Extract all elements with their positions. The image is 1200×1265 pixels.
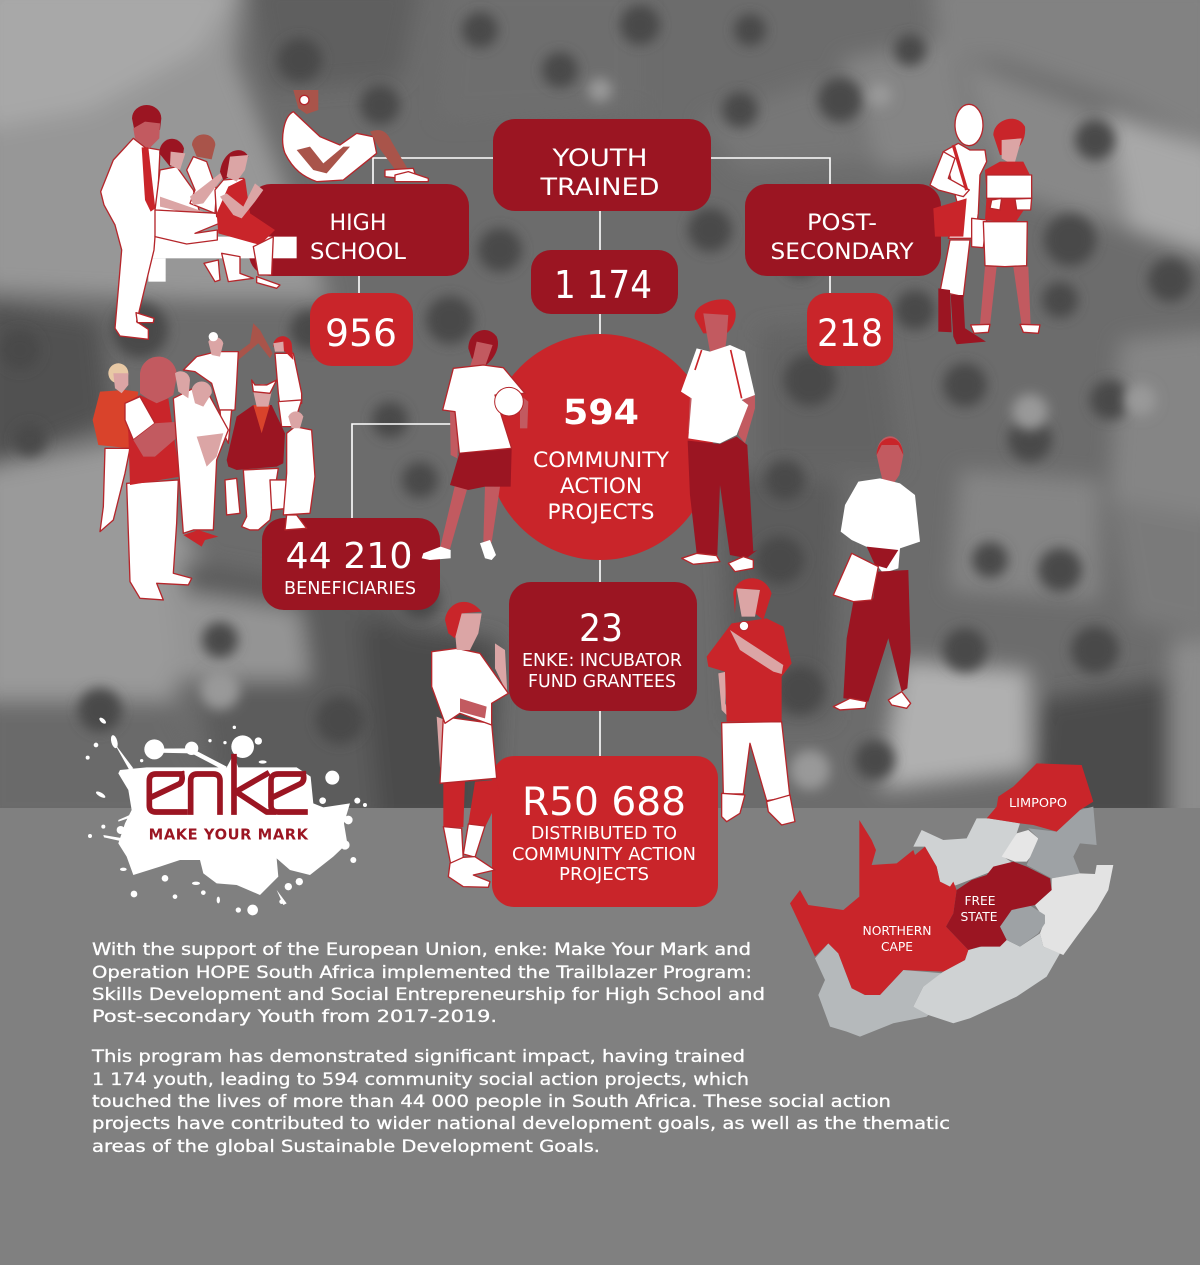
box: 218 [807,293,893,366]
box: rand distributed: COMMUNITY ACTION [512,845,696,865]
box: incubator fund grantees [509,582,697,711]
logo: white paint splat with enke wordmark [86,717,367,915]
box: beneficiaries: BENEFICIARIES [284,579,416,599]
logo: white paint splat with enke wordmark: MAKE YOUR MARK [149,826,309,843]
box: youth trained [493,119,711,211]
figures: community group high five [93,323,315,600]
figures: two young women, post-secondary [930,104,1040,344]
text block: program intro: Operation HOPE South Africa implemented the Trailblazer Program: [92,963,752,982]
background photo: crowd of youth in greyscale [0,0,1200,828]
lesotho [1000,903,1045,947]
box: 1 174 [531,250,678,314]
box: beneficiaries [262,518,440,610]
box: rand distributed [492,756,718,907]
limpopo province [987,763,1093,832]
box: beneficiaries: 44 210 [286,536,412,577]
figures: teacher and pupils on bench [101,105,297,339]
box: incubator fund grantees: ENKE: INCUBATOR [522,651,682,671]
box: rand distributed: DISTRIBUTED TO [531,824,677,844]
gauteng province [1002,830,1038,862]
text block: program intro: With the support of the European Union, enke: Make Your Mark and [92,940,751,959]
circle: community action projects: PROJECTS [548,500,654,524]
eastern cape province [913,933,1060,1023]
circle: community action projects: ACTION [560,474,642,498]
box: 1 174: 1 174 [554,263,652,307]
figure: girl in long jacket [432,602,508,887]
text block: program intro: Post-secondary Youth from 2017-2019. [92,1007,497,1026]
figure: man with shoulder bag [833,436,920,710]
north west province [913,818,1020,887]
box: incubator fund grantees: FUND GRANTEES [528,672,676,692]
map of South Africa: FREE [964,894,996,908]
kwazulu-natal province [1035,865,1113,955]
text block: program impact: areas of the global Sustainable Development Goals. [92,1137,600,1156]
box: post-secondary [745,184,941,276]
text block: program impact [91,1047,950,1156]
box: 956: 956 [325,312,397,355]
figure: tall youth with backpack [681,299,757,572]
northern cape province [790,820,968,995]
box: high school [249,184,469,276]
box: post-secondary: SECONDARY [770,240,914,265]
figure: boy with dreadlocks and peace sign [707,578,795,825]
grey footer panel [0,808,1200,1265]
text block: program intro: Skills Development and Social Entrepreneurship for High School and [92,985,765,1004]
map of South Africa: CAPE [881,940,913,954]
circle: community action projects [487,334,713,560]
box: high school: SCHOOL [310,240,407,265]
box: 218: 218 [817,312,883,355]
box: rand distributed: R50 688 [522,780,686,825]
map of South Africa: STATE [960,910,998,924]
mpumalanga province [1027,807,1097,878]
box: post-secondary: POST- [807,211,877,236]
box: 956 [310,293,413,366]
map labels: LIMPOPO [1009,796,1067,810]
western cape province [815,943,942,1037]
map of South Africa [790,763,1113,1037]
circle: community action projects: COMMUNITY [533,448,669,472]
box: incubator fund grantees: 23 [579,607,623,650]
text block: program intro [92,940,765,1026]
connector lines [352,158,830,756]
text block: program impact: 1 174 youth, leading to 594 community social action projects, which [92,1070,749,1089]
figure: teen with headphones writing [283,90,428,182]
free state province [946,862,1052,950]
figure: girl with soccer ball [422,330,528,560]
text block: program impact: projects have contributed to wider national development goals, as well as the thematic [92,1114,950,1133]
box: youth trained: YOUTH [551,144,648,172]
text block: program impact: This program has demonstrated significant impact, having trained [91,1047,745,1066]
text block: program impact: touched the lives of more than 44 000 people in South Africa. These social action [92,1092,891,1111]
box: rand distributed: PROJECTS [559,865,649,885]
box: youth trained: TRAINED [539,173,660,201]
map of South Africa: NORTHERN [862,924,932,938]
circle: community action projects: 594 [563,393,639,433]
box: high school: HIGH [330,211,386,236]
